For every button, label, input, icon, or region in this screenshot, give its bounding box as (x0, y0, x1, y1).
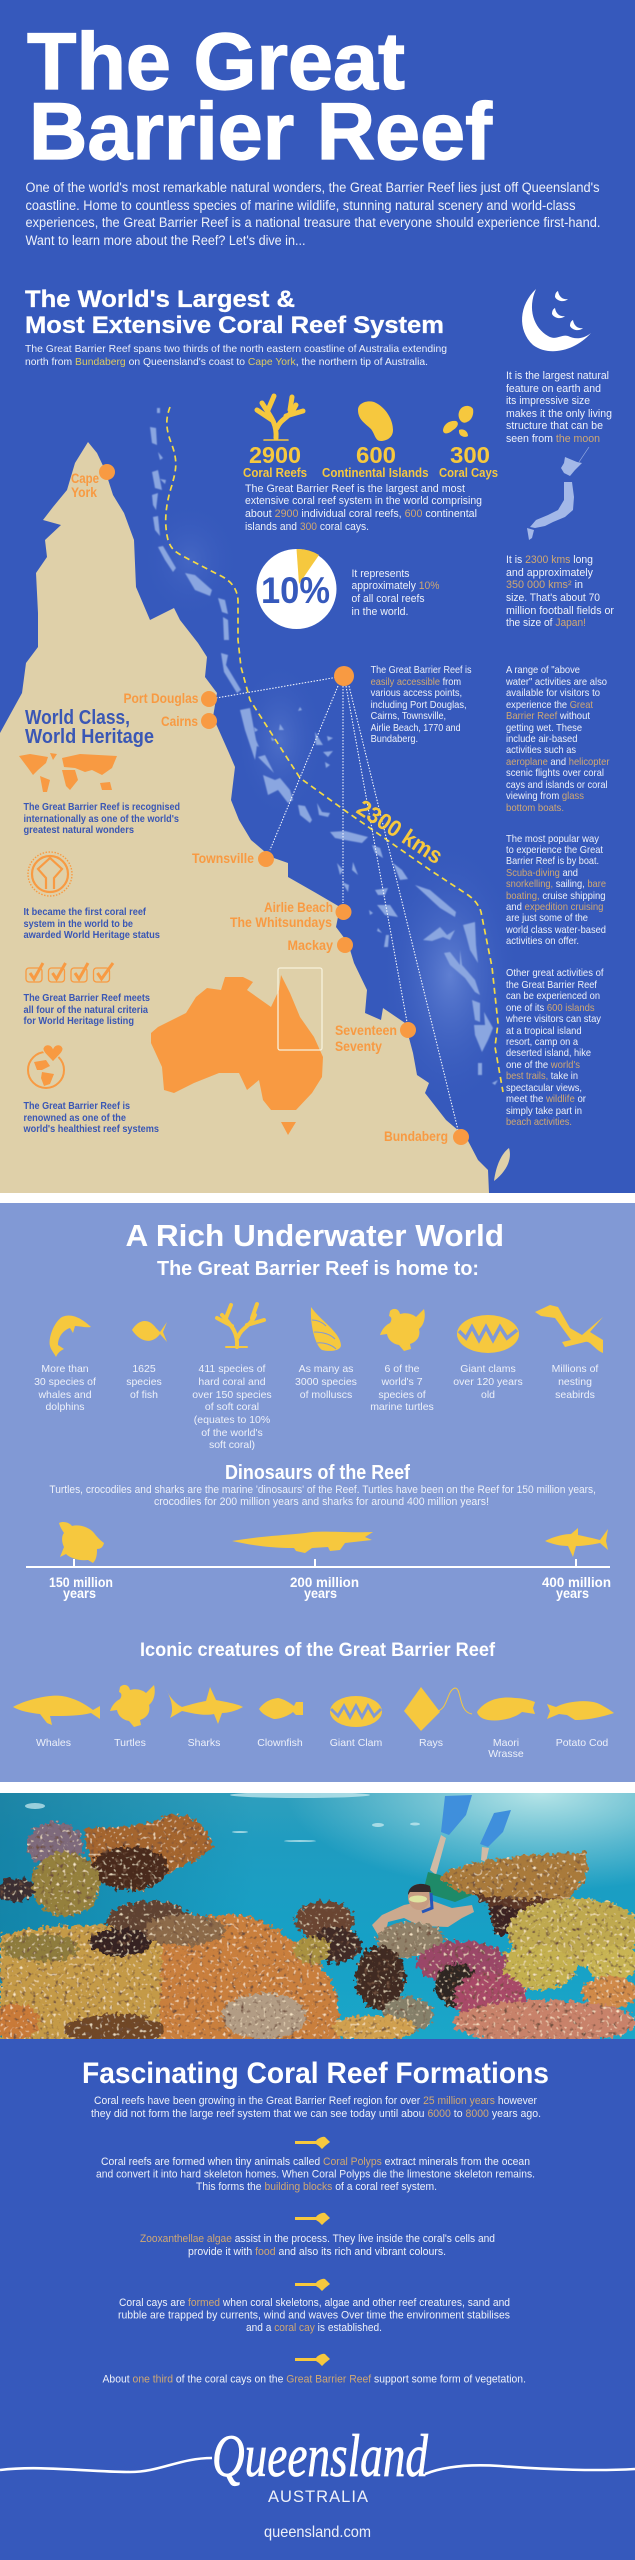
text: giant clams: old (481, 1389, 495, 1401)
text: seabirds: Millions of (552, 1363, 598, 1375)
text: fish: 1625 (132, 1363, 156, 1375)
label: 2300 kms: 2300 kms (352, 794, 448, 869)
heading: World Class, World Heritage: World Heritage (25, 726, 154, 748)
text: fish: species (126, 1376, 162, 1388)
text: molluscs: 3000 species (295, 1376, 357, 1388)
land (0, 442, 489, 1193)
text: heritage fact four: The Great Barrier Reef is (24, 1100, 130, 1112)
text: largest natural feature (506, 370, 612, 445)
text: other activities: at a tropical island (506, 1026, 582, 1037)
text: other activities: Other great activities of (506, 968, 604, 979)
icon: fish (132, 1321, 167, 1342)
location: Bundaberg: Bundaberg (384, 1128, 448, 1144)
stats: reef counts: Coral Cays (439, 465, 498, 480)
text: water activities: Scuba-diving and (506, 868, 578, 879)
text: size of reef (506, 554, 614, 629)
heading: Iconic creatures: Iconic creatures of the Great Barrier Reef (140, 1639, 495, 1661)
creature labels: Clownfish (257, 1737, 303, 1749)
text: turtles (370, 1363, 434, 1413)
location: Cairns: Cairns (161, 713, 198, 729)
text: other activities: one of its 600 islands (506, 1003, 595, 1014)
text: access points: including Port Douglas, (371, 700, 467, 711)
creature labels: Rays (419, 1737, 443, 1749)
text: other activities: best trails, take in (506, 1071, 578, 1082)
text: represents 10% (352, 568, 440, 618)
text: above water activities: available for visitors to (506, 688, 600, 699)
stats: reef counts: Coral Reefs (243, 465, 307, 480)
panel: coral reef formations background (0, 2039, 635, 2560)
photo: snorkeller over coral reef (0, 1792, 635, 2046)
text: giant clams (453, 1363, 523, 1401)
location: Seventeen Seventy: Seventeen (335, 1022, 397, 1038)
ocean glow (140, 500, 520, 1110)
creature labels: Potato Cod (556, 1737, 608, 1749)
text: turtles: world's 7 (380, 1376, 423, 1388)
text: heritage fact three: The Great Barrier Reef meets (24, 992, 150, 1004)
creature labels: Turtles (114, 1737, 146, 1749)
text: reef system description (245, 483, 482, 533)
text: coral: hard coral and (198, 1376, 266, 1388)
icon: giant clam (457, 1315, 519, 1353)
label: 200 million years: years (304, 1586, 337, 1601)
text: coral: over 150 species (192, 1389, 272, 1401)
text: water activities (505, 834, 606, 947)
text: represents 10%: It represents (352, 568, 410, 580)
text: above water activities: include air-based (506, 734, 578, 745)
location: Airlie Beach (230, 899, 352, 930)
text: largest natural feature: structure that can be (506, 420, 603, 432)
icon: timeline crocodile (232, 1532, 373, 1553)
label: 200 million years: 200 million (290, 1575, 359, 1590)
label: 400 million years: years (556, 1586, 589, 1601)
icon: ray (404, 1687, 472, 1731)
text: access points: various access points, (371, 688, 462, 699)
text: heritage fact two: system in the world to be (24, 918, 133, 930)
text: heritage fact three: for World Heritage listing (24, 1015, 134, 1027)
intro text: Want to learn more about the Reef? Let's dive in... (26, 233, 306, 248)
map: Japan (527, 447, 589, 540)
text: whales and dolphins (34, 1363, 96, 1413)
intro text: experiences, the Great Barrier Reef is a national treasure that everyone should experience first-hand. (26, 215, 600, 230)
text: seabirds (552, 1363, 598, 1401)
Fraser Island (494, 1148, 510, 1181)
text: other activities: where visitors can stay (505, 1014, 602, 1025)
text: water activities: are just some of the (506, 913, 588, 924)
heading: world's largest: The World's Largest & (25, 286, 295, 313)
text: other activities: the Great Barrier Reef (506, 980, 597, 991)
text: largest natural feature: makes it the only living (506, 408, 612, 420)
icon: turtle (110, 1685, 155, 1727)
text: above water activities: water" activities are also (505, 677, 607, 688)
text: above water activities (505, 665, 610, 814)
text: heritage fact one: internationally as one of the world's (24, 813, 179, 825)
text: size of reef: It is 2300 kms long (506, 554, 593, 566)
text: water activities: snorkelling, sailing, bare (506, 879, 606, 890)
text: largest natural feature: seen from the moon (506, 433, 600, 445)
icon: mollusc shell (311, 1307, 341, 1351)
text: vegetation: About one third of the coral cays on the Great Barrier Reef support some form of vegetation. (102, 2374, 526, 2386)
icon: timeline turtle (59, 1522, 104, 1563)
text: water activities: The most popular way (506, 834, 600, 845)
text: reef system description: The Great Barrier Reef is the largest and most (245, 483, 465, 495)
heading: A Rich Underwater World: A Rich Underwater World (126, 1218, 504, 1253)
icon: timeline shark (545, 1528, 608, 1557)
icon: dolphin (50, 1315, 91, 1357)
text: whales and dolphins: More than (41, 1363, 89, 1375)
icon: maori wrasse (477, 1698, 535, 1721)
text: coral polyps: Coral reefs are formed when tiny animals called Coral Polyps extract minerals from the ocean (101, 2156, 530, 2168)
text: size of reef: the size of Japan! (506, 617, 586, 629)
text: other activities: simply take part in (506, 1106, 582, 1117)
text: other activities: beach activities. (506, 1117, 572, 1128)
chart: 10 percent: 10% (261, 570, 330, 611)
subheading text: north from Bundaberg on Queensland's coast to Cape York, the northern tip of Australia. (25, 356, 428, 368)
text: access points: Cairns, Townsville, (371, 711, 446, 722)
logo: Queensland Australia (0, 2423, 635, 2506)
text: reef system description: extensive coral reef system in the world comprising (245, 495, 482, 507)
text: coral polyps (96, 2156, 535, 2193)
text: size of reef: 350 000 kms² in (506, 579, 583, 591)
icon: fish arrow two (295, 2213, 330, 2225)
text: coral cays: and a coral cay is established. (246, 2322, 382, 2334)
text: above water activities: cays and islands or coral (506, 780, 608, 791)
text: heritage fact four (23, 1100, 159, 1135)
text: heritage fact one: greatest natural wonders (24, 824, 134, 836)
text: formations intro: Coral reefs have been growing in the Great Barrier Reef region for over 25 million years however (94, 2095, 537, 2107)
text: molluscs (295, 1363, 357, 1401)
subheading: home to: The Great Barrier Reef is home to: (157, 1258, 479, 1280)
text: zooxanthellae (140, 2233, 495, 2258)
text: access points (371, 665, 472, 745)
icon: whale (13, 1696, 100, 1725)
text: represents 10%: approximately 10% (352, 580, 440, 592)
text: website: queensland.com (264, 2524, 371, 2541)
text: other activities (505, 968, 604, 1128)
icon: fish arrow three (295, 2279, 330, 2291)
text: size of reef: size. That's about 70 (506, 592, 600, 604)
text: size of reef: million football fields or (506, 605, 614, 617)
marker: access hub (334, 666, 354, 686)
text: heritage fact two (24, 906, 160, 941)
icon: coral (257, 396, 303, 440)
text: heritage fact two: awarded World Heritage status (24, 929, 160, 941)
text: coral: (equates to 10% (194, 1414, 270, 1426)
photo: foreground coral (0, 1914, 416, 2046)
icon: moon (522, 289, 591, 351)
creature labels (36, 1737, 608, 1760)
dashed reef extent line (166, 407, 503, 1092)
text: coral: 411 species of (199, 1363, 266, 1375)
text: coral polyps: and convert it into hard skeleton homes. When Coral Polyps die the limestone skeleton remains. (96, 2168, 535, 2180)
text: heritage fact four: world's healthiest reef systems (23, 1123, 159, 1135)
label: 400 million years: 400 million (542, 1575, 611, 1590)
text: zooxanthellae: provide it with food and also its rich and vibrant colours. (188, 2246, 446, 2258)
text: largest natural feature: feature on earth and (506, 383, 601, 395)
location: Port Douglas: Port Douglas (124, 690, 199, 706)
text: formations intro (91, 2095, 541, 2120)
icon: world heritage emblem (28, 852, 72, 896)
chart: timeline (26, 1522, 611, 1601)
title: Barrier Reef (29, 87, 493, 177)
text: fish: of fish (130, 1389, 158, 1401)
icon: fish arrow four (295, 2354, 330, 2366)
text: coral polyps: This forms the building blocks of a coral reef system. (196, 2181, 437, 2193)
photo: table coral right (355, 1852, 635, 2044)
text: heritage fact one: The Great Barrier Reef is recognised (24, 801, 180, 813)
creature labels: Whales (36, 1737, 71, 1749)
logo: Queensland Australia: AUSTRALIA (268, 2488, 368, 2506)
text: size of reef: and approximately (506, 567, 593, 579)
title (27, 17, 493, 177)
text: molluscs: As many as (299, 1363, 353, 1375)
text: coral (192, 1363, 272, 1451)
text: coral: of soft coral (205, 1401, 259, 1413)
text: turtles: species of (378, 1389, 426, 1401)
text: molluscs: of molluscs (300, 1389, 352, 1401)
text: whales and dolphins: whales and (37, 1389, 92, 1401)
text: dinosaurs description (49, 1484, 596, 1508)
text: coral: soft coral) (209, 1439, 255, 1451)
location: Airlie Beach: The Whitsundays (230, 914, 332, 930)
icon: shark (166, 1687, 243, 1724)
location: Airlie Beach: Airlie Beach (264, 899, 333, 915)
label: 150 million years: 150 million (49, 1575, 113, 1590)
text: above water activities: getting wet. These (506, 723, 582, 734)
text: water activities: to experience the Great (506, 845, 603, 856)
label: 150 million years: years (63, 1586, 96, 1601)
chart: 10 percent (256, 549, 336, 629)
text: largest natural feature: It is the largest natural (506, 370, 609, 382)
title: The Great (27, 17, 405, 107)
text: turtles: marine turtles (370, 1401, 434, 1413)
text: largest natural feature: its impressive size (506, 395, 590, 407)
icon: fish arrow one (295, 2137, 330, 2149)
text: dinosaurs description: crocodiles for 200 million years and sharks for around 400 million years! (154, 1496, 489, 1508)
text: water activities: Barrier Reef is by boat. (506, 856, 599, 867)
intro text: One of the world's most remarkable natural wonders, the Great Barrier Reef lies just off Queensland's (26, 180, 600, 195)
heading: World Class, World Heritage: World Class, (25, 707, 130, 729)
text: fish (126, 1363, 162, 1401)
text: water activities: boating, cruise shipping (506, 891, 606, 902)
stats: reef counts: 300 (450, 442, 490, 468)
creature labels: Maori (493, 1737, 519, 1749)
text: other activities: one of the world's (506, 1060, 580, 1071)
icon: heart and globe (28, 1045, 64, 1088)
text: represents 10%: of all coral reefs (352, 593, 425, 605)
intro text: coastline. Home to countless species of marine wildlife, stunning natural scenery and world-class (26, 198, 576, 213)
icon: world map (19, 753, 117, 792)
heading: world's largest (25, 286, 444, 339)
stats: reef counts: Continental Islands (322, 465, 428, 480)
panel: top blue background (0, 0, 635, 1193)
text: above water activities: A range of "above (506, 665, 580, 676)
icon: potato cod (547, 1701, 614, 1720)
location: Cape York: York (71, 484, 97, 500)
location: Cape York (71, 464, 115, 500)
logo: Queensland Australia: Queensland (212, 2423, 429, 2489)
heading: world's largest: Most Extensive Coral Reef System (25, 312, 444, 339)
text: other activities: meet the wildlife or (506, 1094, 587, 1105)
location: Seventeen Seventy (335, 1022, 416, 1054)
icon: clownfish (259, 1698, 303, 1719)
text: above water activities: Barrier Reef without (506, 711, 590, 722)
text: access points: Bundaberg. (371, 734, 418, 745)
text: turtles: 6 of the (384, 1363, 420, 1375)
text: formations intro: they did not form the large reef system that we can see today until abou 6000 to 8000 years ago. (91, 2108, 541, 2120)
text: zooxanthellae: Zooxanthellae algae assist in the process. They live inside the coral's cells and (140, 2233, 495, 2245)
text: other activities: resort, camp on a (506, 1037, 578, 1048)
text: other activities: spectacular views, (506, 1083, 582, 1094)
text: giant clams: over 120 years (453, 1376, 523, 1388)
text: seabirds: nesting (558, 1376, 592, 1388)
text: heritage fact three: all four of the natural criteria (24, 1004, 148, 1016)
text: above water activities: scenic flights over coral (506, 768, 604, 779)
text: coral cays (118, 2297, 510, 2334)
text: above water activities: experience the Great (506, 700, 593, 711)
text: seabirds: seabirds (555, 1389, 595, 1401)
label: 200 million years (290, 1575, 359, 1601)
label: 400 million years (542, 1575, 611, 1601)
creature labels: Sharks (188, 1737, 220, 1749)
text: heritage fact four: renowned as one of the (24, 1112, 126, 1124)
text: water activities: world class water-based (505, 925, 606, 936)
reef patches (150, 408, 498, 1085)
panel: rich underwater world background (0, 1203, 635, 1782)
text: coral cays: Coral cays are formed when coral skeletons, algae and other reef creatures, sand and (119, 2297, 510, 2309)
photo: snorkeller (372, 1795, 511, 1936)
dotted access lines (216, 676, 458, 1130)
location: Seventeen Seventy: Seventy (335, 1038, 382, 1054)
stats: reef counts (243, 442, 498, 480)
creature labels: Wrasse (488, 1748, 524, 1760)
text: giant clams: Giant clams (460, 1363, 516, 1375)
text: heritage fact three (24, 992, 150, 1027)
label: 150 million years (49, 1575, 113, 1601)
location: Townsville: Townsville (192, 850, 254, 866)
photo: back coral (0, 1815, 361, 1963)
icon: coral cays (443, 406, 473, 437)
map: Queensland coast, reefs and routes (0, 407, 520, 1193)
text: water activities: and expedition cruising (506, 902, 604, 913)
text: access points: Airlie Beach, 1770 and (371, 723, 461, 734)
text: water activities: activities on offer. (506, 936, 579, 947)
text: coral: of the world's (201, 1427, 263, 1439)
text: heritage fact two: It became the first coral reef (24, 906, 146, 918)
text: reef system description: about 2900 individual coral reefs, 600 continental (245, 508, 477, 520)
intro text (26, 180, 600, 248)
icon: continental island (358, 401, 393, 441)
text: dinosaurs description: Turtles, crocodiles and sharks are the marine 'dinosaurs' of the Reef. Turtles have been on the Reef for 150 million years, (49, 1484, 596, 1496)
icon: four checkmarks (26, 963, 113, 982)
heading: Dinosaurs of the Reef: Dinosaurs of the Reef (225, 1462, 410, 1484)
stats: reef counts: 2900 (249, 442, 301, 468)
map: Australia with Queensland highlight (151, 968, 323, 1135)
creature labels: Giant Clam (330, 1737, 383, 1749)
heading: Fascinating Coral Reef Formations: Fascinating Coral Reef Formations (82, 2057, 549, 2090)
text: above water activities: activities such as (506, 745, 576, 756)
text: above water activities: bottom boats. (506, 803, 564, 814)
text: above water activities: aeroplane and helicopter (506, 757, 610, 768)
icon: seabird (535, 1305, 603, 1353)
icon: giant clam (330, 1696, 382, 1727)
text: heritage fact one (24, 801, 180, 836)
text: access points: easily accessible from (371, 677, 461, 688)
location: Cape York: Cape (71, 470, 99, 486)
stats: reef counts: 600 (356, 442, 396, 468)
text: whales and dolphins: 30 species of (34, 1376, 96, 1388)
text: other activities: can be experienced on (506, 991, 600, 1002)
text: above water activities: viewing from glass (506, 791, 584, 802)
text: access points: The Great Barrier Reef is (371, 665, 472, 676)
text: other activities: deserted island, hike (506, 1048, 591, 1059)
subheading text (25, 343, 447, 368)
icon: hard coral (217, 1304, 264, 1347)
photo: surface highlights (25, 1792, 420, 1842)
heading: World Class, World Heritage (25, 707, 154, 748)
subheading text: The Great Barrier Reef spans two thirds of the north eastern coastline of Australia extending (25, 343, 447, 355)
text: coral cays: rubble are trapped by currents, wind and waves Over time the environment stabilises (118, 2310, 510, 2322)
text: whales and dolphins: dolphins (45, 1401, 85, 1413)
icon: turtle (380, 1309, 425, 1351)
text: represents 10%: in the world. (352, 606, 408, 618)
text: reef system description: islands and 300 coral cays. (245, 521, 369, 533)
location: Mackay: Mackay (288, 937, 333, 953)
